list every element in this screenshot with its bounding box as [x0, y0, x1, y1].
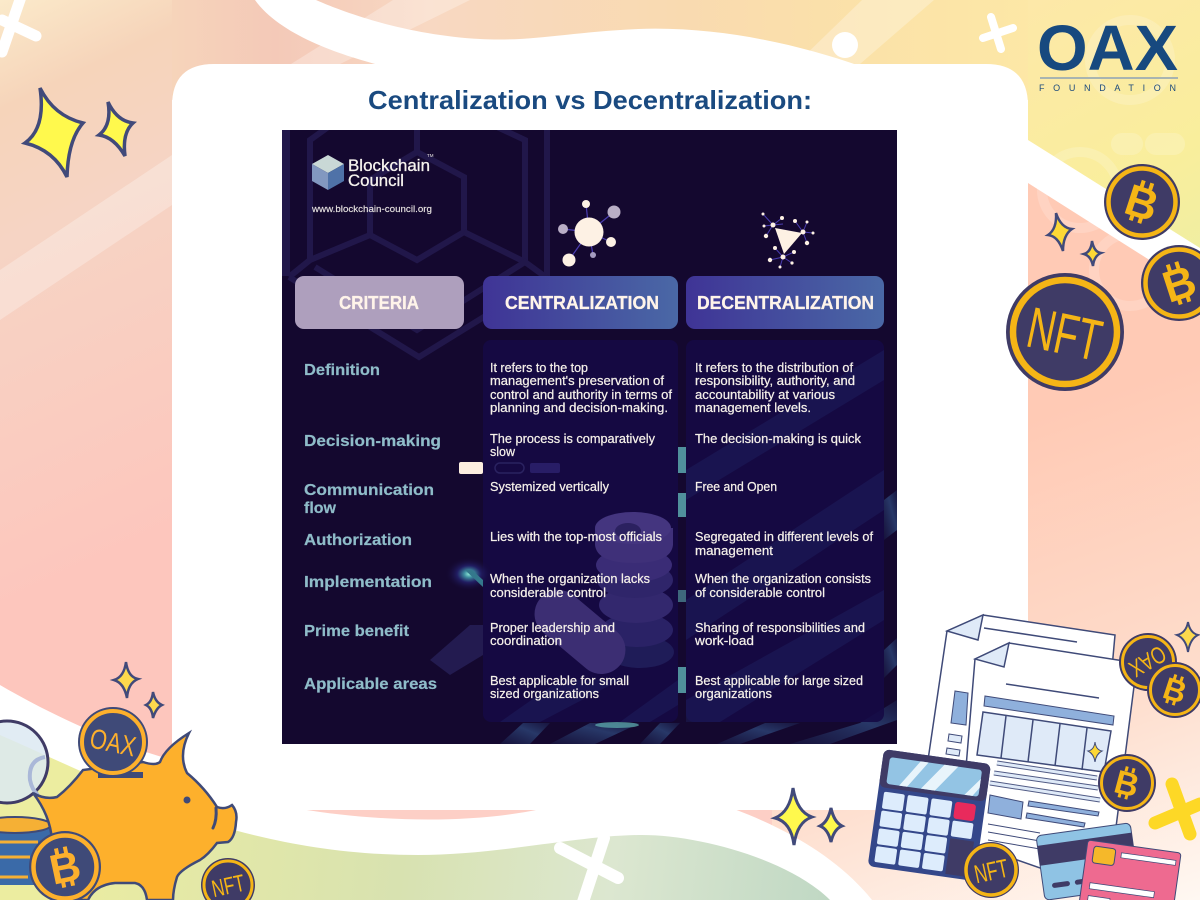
credit card: pink [1077, 840, 1181, 900]
decentralization column text [694, 361, 874, 701]
logo wordmark second line: Council [348, 171, 404, 190]
centralization column text: When the organization lacks [490, 572, 650, 586]
coin: NFT on calculator: NFT [971, 853, 1011, 889]
coin: bitcoin lower right [1147, 662, 1200, 718]
header: centralization [483, 276, 678, 329]
header: decentralization [686, 276, 884, 329]
centralization column text: considerable control [490, 586, 606, 600]
logo wordmark: Blockchain [348, 156, 430, 175]
centralization column text: It refers to the top [490, 361, 588, 375]
logo wordmark: OAX [1037, 12, 1178, 84]
teal column gap highlights [678, 447, 686, 693]
coin: NFT on calculator [963, 842, 1019, 898]
white right diagonal band [1028, 140, 1200, 292]
decentralization column text: organizations [695, 687, 772, 701]
criteria column labels: Decision-making [304, 433, 441, 450]
coin: bitcoin right edge [1141, 245, 1200, 321]
centralization column text: Proper leadership and [490, 621, 615, 635]
comparison table image [282, 120, 897, 744]
hexagon pattern [282, 120, 547, 357]
centralization column text [490, 361, 673, 701]
icon: decentralized network [762, 212, 814, 268]
logo rule [1040, 77, 1178, 79]
sparkles top right [1048, 213, 1101, 266]
criteria column labels: Applicable areas [304, 676, 437, 693]
centralization column text: coordination [490, 634, 562, 648]
sparkle lower right [1177, 622, 1198, 652]
coin: bitcoin on pig: B [45, 841, 85, 894]
coin: bitcoin lower right: B [1159, 670, 1191, 711]
centralization column text: planning and decision-making. [490, 401, 668, 415]
coin: bitcoin on document: B [1111, 763, 1143, 804]
decentralization column text: accountability at various [695, 388, 835, 402]
sparkles top left [25, 88, 133, 177]
sparkles above piggy bank [114, 662, 162, 718]
coin: NFT bottom [201, 858, 255, 900]
white lower left band [0, 685, 300, 900]
white top wave [255, 0, 860, 66]
faint panel streaks [500, 350, 884, 722]
header: criteria: CRITERIA [339, 293, 419, 313]
decentralization column text: management levels. [695, 401, 811, 415]
dark background [282, 130, 897, 744]
decentralization column text: management [695, 544, 774, 558]
decentralization column text: work-load [694, 634, 754, 648]
criteria column labels: Authorization [304, 532, 412, 549]
background diagonal light stripes [0, 0, 934, 320]
criteria column labels: flow [304, 500, 337, 517]
coin: bitcoin top right [1104, 164, 1180, 240]
background lower centre pink [172, 800, 772, 900]
decentralization column text: Best applicable for large sized [695, 674, 863, 688]
criteria column labels: Definition [304, 362, 380, 379]
calculator [868, 749, 991, 881]
coin: OAX on pig: OAX [87, 723, 139, 762]
background top right yellow [1028, 0, 1200, 300]
centralization column text: Best applicable for small [490, 674, 629, 688]
decentralization column text: responsibility, authority, and [695, 374, 855, 388]
coin stack [0, 817, 51, 885]
coin: bitcoin on document [1098, 754, 1156, 812]
criteria column labels: Prime benefit [304, 623, 410, 640]
faint ring decorations [1042, 20, 1180, 306]
background top band [172, 0, 1028, 100]
icon: centralized network [558, 200, 620, 266]
sparkles bottom centre [775, 788, 842, 845]
centralization column text: management's preservation of [490, 374, 665, 388]
yellow plus decoration [1155, 784, 1200, 834]
coin: NFT large [1006, 273, 1124, 391]
criteria column labels: Communication [304, 482, 434, 499]
criteria column labels: Implementation [304, 574, 432, 591]
centralization column text: sized organizations [490, 687, 599, 701]
light streaks [500, 490, 897, 744]
decentralization column text: Sharing of responsibilities and [695, 621, 865, 635]
criteria column labels [304, 362, 441, 693]
centralization column text: control and authority in terms of [490, 388, 673, 402]
column panels [483, 340, 884, 722]
decentralization column text: of considerable control [695, 586, 825, 600]
decentralization column text: Free and Open [695, 480, 777, 494]
bottom teal glow [595, 722, 639, 728]
credit card: blue [1036, 823, 1139, 900]
trademark mark: TM [427, 153, 434, 158]
Blockchain Council logo [311, 153, 434, 215]
header: centralization: CENTRALIZATION [505, 293, 659, 313]
logo subtitle: FOUNDATION [1039, 83, 1176, 93]
document: back sheet [928, 615, 1115, 800]
background left panel [0, 0, 172, 900]
document: front sheet with table [960, 643, 1137, 868]
centralization column text: slow [490, 445, 516, 459]
decentralization column text: It refers to the distribution of [695, 361, 854, 375]
website address: www.blockchain-council.org [311, 204, 432, 215]
coin: bitcoin on pig [29, 831, 101, 900]
green lower wave [0, 735, 830, 900]
faint cross streak beside table [430, 625, 483, 675]
main white card [172, 64, 1028, 810]
header: decentralization: DECENTRALIZATION [697, 293, 874, 313]
coin: OAX lower right [1119, 633, 1177, 691]
coin: OAX on pig [78, 707, 148, 777]
coin: NFT large: NFT [1022, 295, 1107, 374]
centralization column text: Systemized vertically [490, 480, 610, 494]
slider pills [459, 462, 560, 474]
title: Centralization vs Decentralization: [368, 85, 812, 115]
cube icon [312, 155, 344, 190]
centralization column text: The process is comparatively [490, 432, 656, 446]
decentralization column text: When the organization consists [695, 572, 871, 586]
decentralization column text: The decision-making is quick [695, 432, 862, 446]
centralization column text: Lies with the top-most officials [490, 530, 662, 544]
glowing dot [450, 560, 486, 588]
background lower right peach [700, 182, 1200, 900]
white lower centre wave [172, 790, 872, 900]
magnifying glass [0, 721, 48, 803]
header: criteria [295, 276, 464, 329]
decentralization column text: Segregated in different levels of [695, 530, 874, 544]
coin: OAX lower right: OAX [1124, 640, 1170, 682]
OAX Foundation logo [1037, 12, 1178, 93]
piggy bank [33, 733, 236, 900]
coin: bitcoin top right: B [1119, 175, 1164, 232]
white dot decoration [832, 32, 858, 58]
server illustration [534, 512, 674, 674]
